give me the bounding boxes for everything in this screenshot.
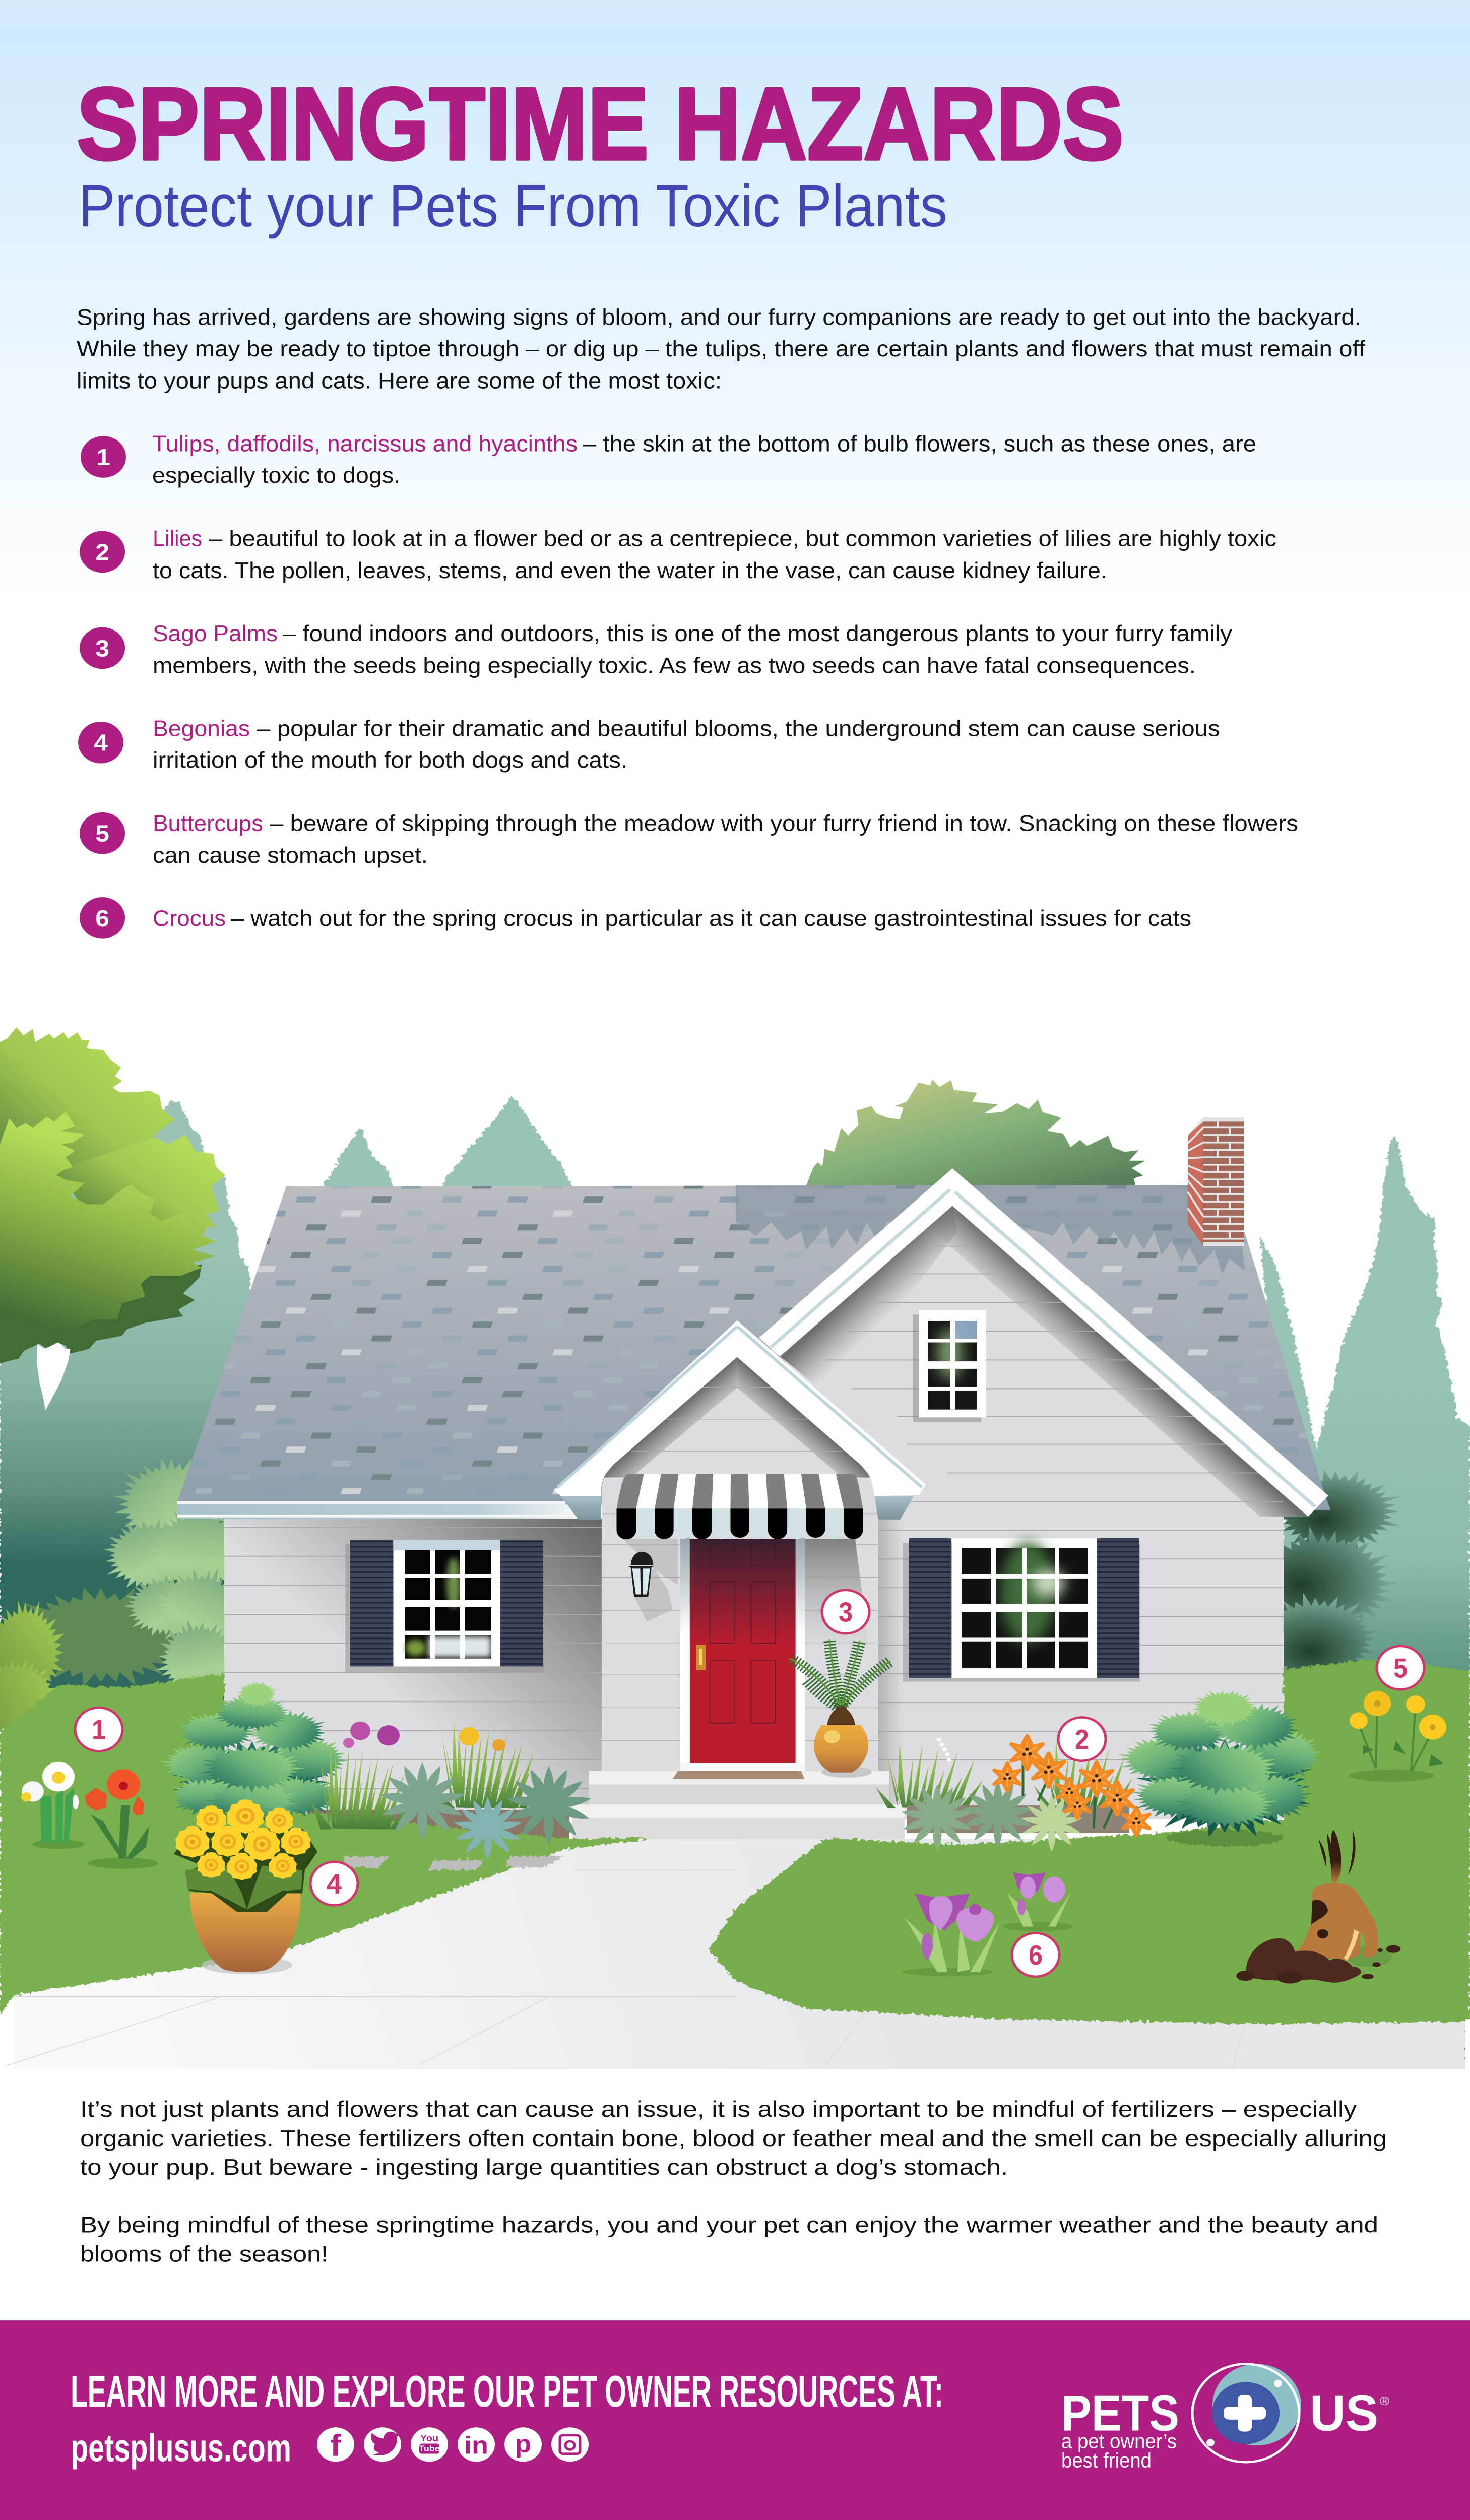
list item 2: lilies: – beautiful to look at in a flower bed or as a centrepiece, but common varieties of lilies are highly toxic: [209, 526, 1276, 551]
begonia pot: [174, 1799, 317, 1974]
list item 3: sago palms: 3: [95, 636, 109, 662]
awning stripes: [616, 1474, 863, 1508]
porch: [554, 1320, 926, 1801]
callout 6: [1012, 1933, 1059, 1977]
list item 4: begonias: irritation of the mouth for both dogs and cats.: [153, 747, 627, 772]
logo: [1061, 2364, 1389, 2472]
gable trim: [554, 1320, 926, 1496]
callout 3: 3: [839, 1597, 853, 1628]
main left wall: [224, 1519, 607, 1815]
lily bed: [875, 1736, 1149, 1852]
list item 4: begonias: Begonias: [153, 716, 250, 741]
buttercups: [1349, 1691, 1446, 1782]
social icons: Tube: [419, 2444, 440, 2453]
sky gradient background: [0, 0, 1470, 602]
logo: PETS: [1061, 2385, 1179, 2442]
large gable trim: [759, 1168, 1328, 1517]
illustration: house and garden: [0, 1027, 1470, 2070]
closing paragraphs: organic varieties. These fertilizers often contain bone, blood or feather meal and the smell can be especially alluring: [80, 2126, 1387, 2151]
lantern: [627, 1552, 655, 1597]
social icons: f: [330, 2429, 342, 2463]
list item 5: buttercups: can cause stomach upset.: [153, 843, 428, 868]
dormer window: [913, 1310, 986, 1422]
list item 2: lilies: to cats. The pollen, leaves, stems, and even the water in the vase, can cause kidney failure.: [153, 558, 1107, 583]
left lawn: [0, 1673, 652, 2014]
logo: a pet owner’s: [1061, 2430, 1177, 2452]
shrub left: [146, 1681, 360, 1830]
list item 2: lilies: [80, 526, 1276, 583]
list item 6: crocus: – watch out for the spring crocus in particular as it can cause gastrointestinal issues for cats: [231, 906, 1191, 930]
list item 1: tulips: – the skin at the bottom of bulb flowers, such as these ones, are: [583, 431, 1256, 456]
logo: ®: [1380, 2395, 1389, 2408]
footer band: [0, 2320, 1470, 2520]
closing paragraphs: [80, 2097, 1387, 2266]
logo: best friend: [1061, 2449, 1152, 2472]
shrub right: [1102, 1684, 1339, 1846]
callout 6: 6: [1029, 1940, 1043, 1971]
callout 1: 1: [92, 1715, 106, 1745]
closing paragraphs: By being mindful of these springtime hazards, you and your pet can enjoy the warmer weather and the beauty and: [80, 2212, 1378, 2237]
list item 3: sago palms: – found indoors and outdoors, this is one of the most dangerous plants to your furry family: [283, 621, 1232, 646]
list item 2: lilies: 2: [95, 540, 109, 565]
list item 3: sago palms: Sago Palms: [153, 621, 278, 646]
list item 6: crocus: 6: [95, 906, 109, 931]
bed plants left: [310, 1720, 592, 1860]
callout 4: 4: [327, 1869, 342, 1900]
social icons: in: [464, 2431, 488, 2459]
list item 5: buttercups: – beware of skipping through the meadow with your furry friend in tow. Snacking on these flowers: [270, 810, 1298, 836]
callout 5: 5: [1393, 1653, 1408, 1684]
tulips: [85, 1769, 158, 1869]
callout 2: 2: [1075, 1724, 1089, 1755]
closing paragraphs: to your pup. But beware - ingesting large quantities can obstruct a dog’s stomach.: [80, 2155, 1008, 2179]
list item 5: buttercups: 5: [95, 822, 109, 847]
background trees left: [0, 1095, 573, 1722]
daffodils: [21, 1762, 85, 1849]
closing paragraphs: It’s not just plants and flowers that can cause an issue, it is also important to be mindful of fertilizers – especially: [80, 2097, 1357, 2122]
title: SPRINGTIME HAZARDS: [77, 67, 1124, 181]
background trees right: [1218, 1135, 1470, 1722]
garden bed soil: [307, 1810, 569, 1841]
door: [690, 1539, 796, 1763]
list item 3: sago palms: [80, 621, 1232, 678]
dog digging: [1236, 1830, 1400, 1983]
eave: [177, 1501, 577, 1519]
social icons: You: [420, 2434, 438, 2444]
door frame: [680, 1538, 805, 1771]
list item 1: tulips: [81, 431, 1256, 488]
door handle: [696, 1645, 706, 1670]
stepping stones: [343, 1856, 564, 1870]
awning scallops: [616, 1508, 863, 1539]
intro paragraph: While they may be ready to tiptoe through – or dig up – the tulips, there are certain plants and flowers that must remain off: [77, 336, 1365, 361]
callout 2: [1058, 1717, 1106, 1761]
walls: [224, 1206, 1308, 1819]
callout 4: [310, 1862, 358, 1905]
closing paragraphs: blooms of the season!: [80, 2241, 328, 2266]
roof: [177, 1185, 1330, 1510]
left tree: [0, 1027, 225, 1411]
list item 2: lilies: Lilies: [153, 526, 202, 551]
list item 1: tulips: 1: [96, 445, 110, 471]
list item 5: buttercups: Buttercups: [153, 810, 263, 836]
callout 3: [822, 1590, 869, 1633]
intro paragraph: limits to your pups and cats. Here are some of the most toxic:: [77, 368, 722, 393]
list item 4: begonias: [78, 716, 1220, 772]
gutter returns: [561, 1496, 601, 1520]
background bush behind roof: [805, 1080, 1145, 1188]
shadow beside porch: [878, 1520, 904, 1816]
website: petsplusus.com: [71, 2426, 291, 2470]
porch wall: [602, 1357, 878, 1801]
crocuses: [902, 1872, 1073, 1976]
left window with shutters: [345, 1540, 544, 1672]
white gap under tree: [37, 1342, 71, 1411]
social icons: p: [515, 2430, 531, 2458]
intro paragraph: Spring has arrived, gardens are showing signs of bloom, and our furry companions are ready to get out into the backyard.: [77, 305, 1361, 330]
awning shadows on wall: [805, 1539, 869, 1650]
list item 3: sago palms: members, with the seeds being especially toxic. As few as two seeds can have fatal consequences.: [153, 653, 1196, 678]
left foliage behind house: [0, 1458, 267, 1755]
list item 1: tulips: especially toxic to dogs.: [152, 463, 400, 488]
list item 5: buttercups: [80, 810, 1298, 868]
list item 6: crocus: [80, 897, 1191, 939]
chimney: [1188, 1117, 1244, 1246]
right window with shutters: [903, 1538, 1140, 1682]
concrete walkway: [7, 1839, 1470, 2069]
list item 1: tulips: Tulips, daffodils, narcissus and hyacinths: [152, 431, 578, 456]
steps: [572, 1771, 905, 1839]
large gable wall: [780, 1206, 1308, 1819]
list item 4: begonias: 4: [94, 731, 108, 756]
sago palm in pot: [790, 1639, 890, 1778]
callout 1: [75, 1708, 122, 1751]
list item 6: crocus: Crocus: [153, 906, 226, 930]
social icons: [317, 2427, 589, 2463]
logo: US: [1310, 2385, 1378, 2442]
list item 4: begonias: – popular for their dramatic and beautiful blooms, the underground stem can cause serious: [257, 716, 1220, 741]
right lawn: [709, 1659, 1470, 2069]
callout 5: [1377, 1646, 1424, 1689]
intro paragraph: [77, 305, 1365, 393]
subtitle: Protect your Pets From Toxic Plants: [79, 173, 947, 239]
